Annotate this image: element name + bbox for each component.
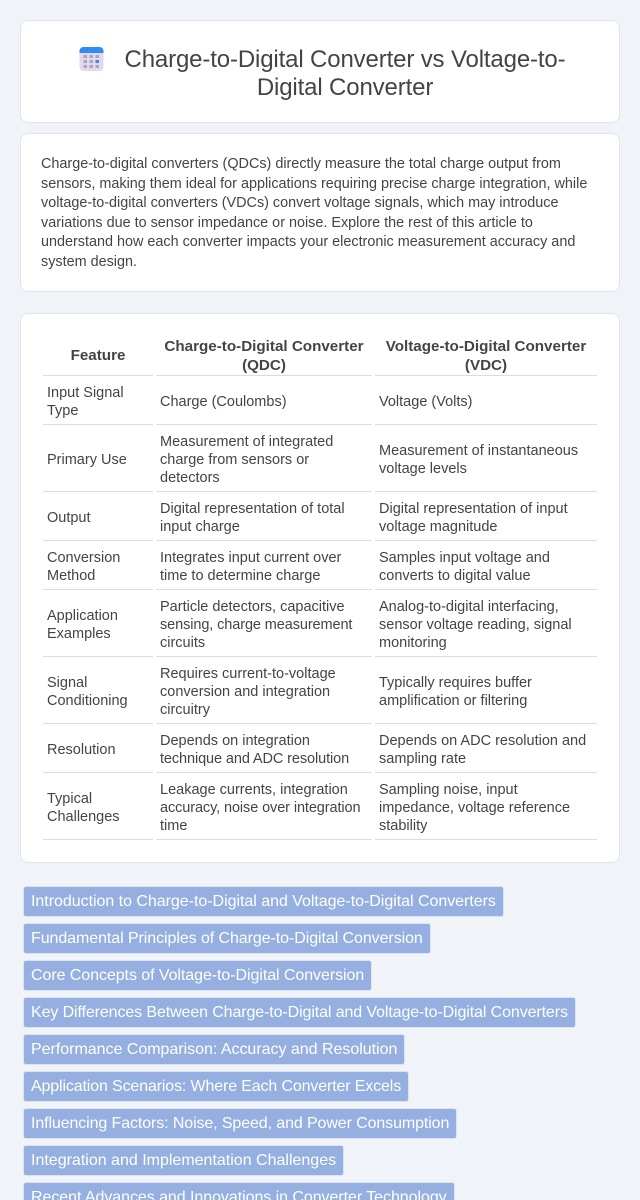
row: signal conditioning: Typically requires buffer bbox=[379, 675, 532, 691]
topic button 9 bbox=[23, 1182, 455, 1200]
topic button 8 bbox=[23, 1145, 344, 1176]
row: output: input charge bbox=[160, 519, 240, 535]
row: output: voltage magnitude bbox=[379, 519, 498, 535]
topic button 2 bbox=[23, 923, 431, 954]
row: resolution: Depends on ADC resolution and bbox=[379, 733, 586, 749]
table header: Voltage-to-Digital Converter bbox=[386, 338, 586, 355]
row: signal conditioning: amplification or filtering bbox=[379, 693, 527, 709]
topic button 4: Key Differences Between Charge-to-Digital and Voltage-to-Digital Converters bbox=[31, 1004, 568, 1021]
row: typical challenges: Sampling noise, input bbox=[379, 782, 518, 798]
row: typical challenges: impedance, voltage reference bbox=[379, 800, 570, 816]
row: typical challenges: Challenges bbox=[47, 809, 120, 825]
title bbox=[124, 46, 565, 101]
row: primary use: voltage levels bbox=[379, 461, 467, 477]
row: signal conditioning: conversion and integration bbox=[160, 684, 330, 700]
row: resolution: Resolution bbox=[47, 742, 116, 758]
row: output: Digital representation of total bbox=[160, 501, 345, 517]
row: primary use bbox=[47, 434, 578, 486]
topic button 6 bbox=[23, 1071, 409, 1102]
row: application examples: circuits bbox=[160, 635, 205, 651]
text block: introduction bbox=[41, 156, 587, 270]
row: resolution: sampling rate bbox=[379, 751, 466, 767]
row: input signal type: Charge (Coulombs) bbox=[160, 394, 287, 410]
row: typical challenges: stability bbox=[379, 818, 427, 834]
panel: title card bbox=[20, 20, 620, 123]
row: input signal type: Voltage (Volts) bbox=[379, 394, 472, 410]
row: application examples: sensing, charge measurement bbox=[160, 617, 352, 633]
table header bbox=[71, 338, 586, 374]
row: input signal type: Input Signal bbox=[47, 385, 124, 401]
row: conversion method: Samples input voltage and bbox=[379, 550, 550, 566]
title: Digital Converter bbox=[257, 74, 433, 101]
row: conversion method: converts to digital value bbox=[379, 568, 531, 584]
topic button 8: Integration and Implementation Challenges bbox=[31, 1152, 336, 1169]
table header: Charge-to-Digital Converter bbox=[164, 338, 364, 355]
row: application examples: Application bbox=[47, 608, 118, 624]
row: typical challenges: accuracy, noise over integration bbox=[160, 800, 360, 816]
row: input signal type bbox=[47, 385, 472, 419]
topic button 7 bbox=[23, 1108, 457, 1139]
table header: Feature bbox=[71, 347, 125, 364]
icon: calendar bbox=[80, 47, 104, 71]
row: signal conditioning: Signal bbox=[47, 675, 87, 691]
row: typical challenges: time bbox=[160, 818, 187, 834]
topic button 2: Fundamental Principles of Charge-to-Digital Conversion bbox=[31, 930, 423, 947]
row: conversion method: time to determine charge bbox=[160, 568, 320, 584]
row: application examples: Analog-to-digital interfacing, bbox=[379, 599, 559, 615]
topic button 7: Influencing Factors: Noise, Speed, and Power Consumption bbox=[31, 1115, 449, 1132]
panel: introduction bbox=[20, 133, 620, 292]
text block: introduction: variations due to sensor impedance or noise. Explore the rest of this article to bbox=[41, 214, 533, 230]
row: conversion method bbox=[47, 550, 550, 584]
table header: (VDC) bbox=[465, 357, 507, 374]
table header: (QDC) bbox=[242, 357, 286, 374]
row: primary use: Measurement of integrated bbox=[160, 434, 333, 450]
row: application examples: monitoring bbox=[379, 635, 447, 651]
topic button 5: Performance Comparison: Accuracy and Resolution bbox=[31, 1041, 397, 1058]
row: primary use: charge from sensors or bbox=[160, 452, 309, 468]
row: typical challenges bbox=[47, 782, 570, 834]
panel: comparison table bbox=[20, 313, 620, 863]
row: primary use: detectors bbox=[160, 470, 220, 486]
row: signal conditioning: circuitry bbox=[160, 702, 210, 718]
topic button 1: Introduction to Charge-to-Digital and Voltage-to-Digital Converters bbox=[31, 893, 496, 910]
row: application examples: Particle detectors, capacitive bbox=[160, 599, 345, 615]
row: primary use: Primary Use bbox=[47, 452, 127, 468]
text block: introduction: understand how each converter impacts your electronic measurement accuracy and bbox=[41, 234, 575, 250]
row: primary use: Measurement of instantaneous bbox=[379, 443, 578, 459]
row: output: Output bbox=[47, 510, 91, 526]
topic button 6: Application Scenarios: Where Each Converter Excels bbox=[31, 1078, 401, 1095]
title: Charge-to-Digital Converter vs Voltage-to- bbox=[124, 46, 565, 73]
topic button 3 bbox=[23, 960, 372, 991]
row: conversion method: Method bbox=[47, 568, 95, 584]
row: input signal type: Type bbox=[47, 403, 78, 419]
row: application examples: Examples bbox=[47, 626, 111, 642]
row: resolution bbox=[47, 733, 586, 767]
row: typical challenges: Leakage currents, integration bbox=[160, 782, 348, 798]
row: conversion method: Conversion bbox=[47, 550, 120, 566]
topic button 1 bbox=[23, 886, 504, 917]
row: output bbox=[47, 501, 568, 535]
topic button 5 bbox=[23, 1034, 405, 1065]
row: signal conditioning bbox=[47, 666, 532, 718]
row: output: Digital representation of input bbox=[379, 501, 568, 517]
row: signal conditioning: Requires current-to-voltage bbox=[160, 666, 336, 682]
row: typical challenges: Typical bbox=[47, 791, 92, 807]
row: conversion method: Integrates input current over bbox=[160, 550, 341, 566]
topic link list bbox=[23, 886, 576, 1200]
row: resolution: Depends on integration bbox=[160, 733, 310, 749]
row: application examples bbox=[47, 599, 572, 651]
text block: introduction: sensors, making them ideal for applications requiring precise charge integration, while bbox=[41, 176, 587, 192]
row: signal conditioning: Conditioning bbox=[47, 693, 128, 709]
topic button 3: Core Concepts of Voltage-to-Digital Conversion bbox=[31, 967, 364, 984]
row: application examples: sensor voltage reading, signal bbox=[379, 617, 572, 633]
text block: introduction: Charge-to-digital converters (QDCs) directly measure the total charge output from bbox=[41, 156, 561, 172]
text block: introduction: voltage-to-digital converters (VDCs) convert voltage signals, which may introduce bbox=[41, 195, 558, 211]
text block: introduction: system design. bbox=[41, 254, 137, 270]
topic button 4 bbox=[23, 997, 576, 1028]
row: resolution: technique and ADC resolution bbox=[160, 751, 349, 767]
